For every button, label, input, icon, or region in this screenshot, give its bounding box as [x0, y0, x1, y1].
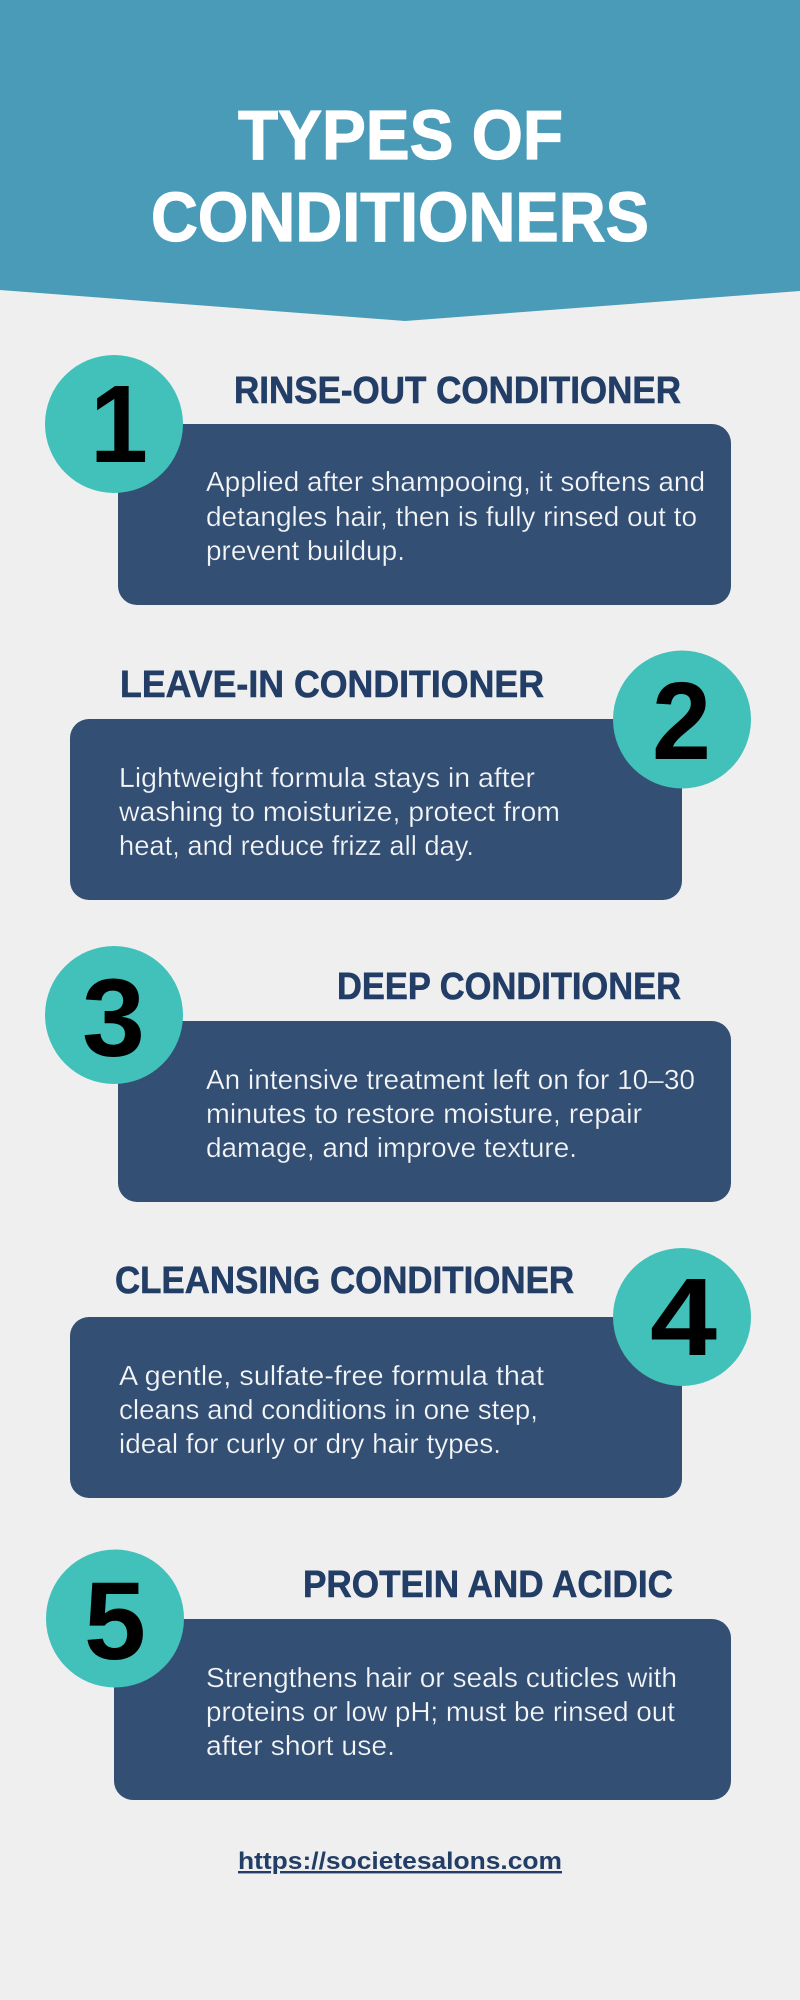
card: cleansing — [70, 1317, 682, 1498]
number badge 3 — [45, 946, 183, 1084]
heading: leave-in: LEAVE-IN CONDITIONER — [120, 664, 544, 706]
website link: https://societesalons.com — [238, 1848, 562, 1875]
description: protein and acidic: Strengthens hair or seals cuticles with — [206, 1662, 677, 1693]
panel: leave-in conditioner — [70, 650, 751, 900]
heading: protein and acidic: PROTEIN AND ACIDIC — [303, 1564, 673, 1606]
number badge 4 — [613, 1248, 751, 1386]
number badge 1: 1 — [90, 363, 148, 486]
panel: deep conditioner — [45, 946, 731, 1202]
header banner — [0, 0, 800, 321]
description: cleansing — [119, 1360, 544, 1459]
number badge 2 — [613, 650, 751, 788]
title — [151, 96, 649, 256]
description: leave-in: heat, and reduce frizz all day. — [119, 830, 474, 861]
description: cleansing: ideal for curly or dry hair types. — [119, 1428, 501, 1459]
description: deep — [206, 1064, 695, 1163]
panel: rinse-out conditioner — [45, 355, 731, 605]
title: CONDITIONERS — [151, 178, 649, 256]
description: protein and acidic: proteins or low pH; must be rinsed out — [206, 1696, 675, 1727]
description: deep: An intensive treatment left on for 10–30 — [206, 1064, 695, 1095]
description: rinse-out: detangles hair, then is fully rinsed out to — [206, 501, 697, 532]
heading: rinse-out: RINSE-OUT CONDITIONER — [234, 370, 681, 412]
description: leave-in: Lightweight formula stays in after — [119, 762, 535, 793]
description: protein and acidic: after short use. — [206, 1730, 395, 1761]
number badge 5 — [46, 1550, 184, 1688]
heading: cleansing: CLEANSING CONDITIONER — [115, 1260, 574, 1302]
description: leave-in: washing to moisturize, protect from — [118, 796, 560, 827]
number badge 3: 3 — [82, 957, 145, 1080]
description: rinse-out: Applied after shampooing, it softens and — [206, 466, 705, 497]
description: deep: damage, and improve texture. — [206, 1132, 577, 1163]
card: leave-in — [70, 719, 682, 900]
description: protein and acidic — [206, 1662, 677, 1761]
description: deep: minutes to restore moisture, repair — [206, 1098, 642, 1129]
description: rinse-out: prevent buildup. — [206, 535, 405, 566]
number badge 2: 2 — [652, 660, 711, 783]
card: deep — [118, 1021, 731, 1202]
panel: cleansing conditioner — [70, 1248, 751, 1498]
description: cleansing: cleans and conditions in one step, — [119, 1394, 538, 1425]
panel: protein and acidic — [46, 1550, 731, 1800]
card: protein and acidic — [114, 1619, 731, 1800]
heading: deep: DEEP CONDITIONER — [337, 966, 681, 1008]
card: rinse-out — [118, 424, 731, 605]
number badge 1 — [45, 355, 183, 493]
description: rinse-out — [206, 466, 705, 566]
title: TYPES OF — [238, 96, 563, 174]
description: cleansing: A gentle, sulfate-free formula that — [119, 1360, 544, 1391]
number badge 5: 5 — [84, 1560, 146, 1683]
number badge 4: 4 — [650, 1256, 717, 1379]
description: leave-in — [118, 762, 560, 861]
